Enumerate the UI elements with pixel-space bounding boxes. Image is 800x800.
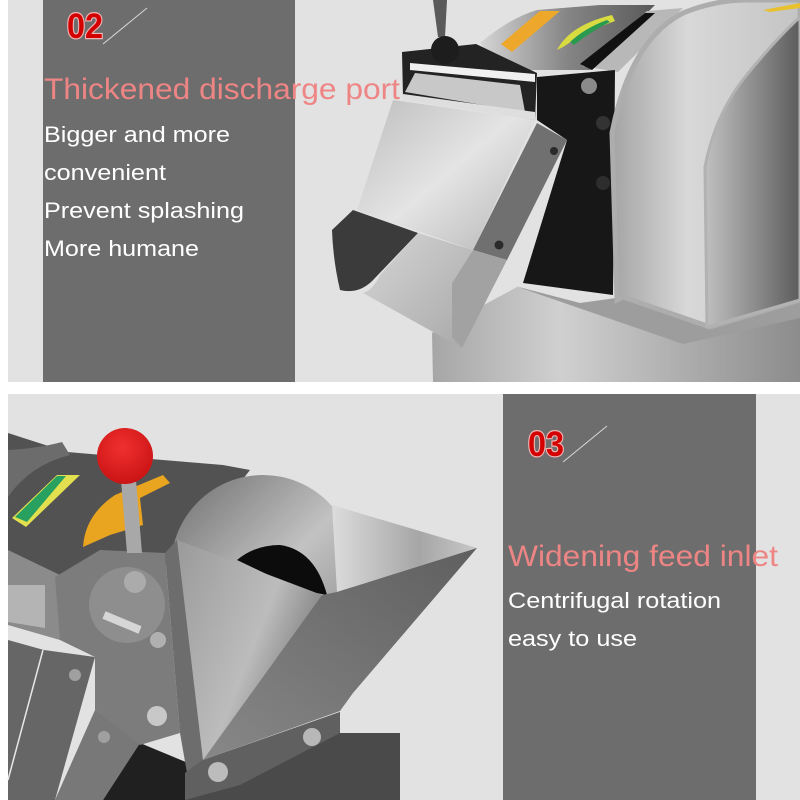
panel: discharge port photo <box>8 0 800 382</box>
mechanism left <box>8 550 60 640</box>
lower chute <box>8 640 95 800</box>
scoop right wall <box>452 250 507 348</box>
rod <box>433 0 447 37</box>
chute sheet <box>357 100 535 250</box>
metal cover <box>612 0 800 327</box>
round drum cover <box>171 475 355 659</box>
text block: Centrifugal rotation <box>508 588 721 613</box>
text block <box>508 588 721 651</box>
panel: discharge port text <box>43 0 401 382</box>
machine: feed hopper and lever <box>8 428 477 800</box>
number badge 02 <box>67 7 147 46</box>
black frame <box>523 70 615 295</box>
cover label <box>763 3 800 12</box>
green label <box>12 475 80 527</box>
machine base <box>432 287 800 382</box>
orange label <box>83 475 170 547</box>
hopper back panel <box>332 505 477 592</box>
number badge 02: 02 <box>67 7 103 46</box>
dark lower body <box>103 743 205 800</box>
hopper left panel <box>177 540 322 760</box>
text block: More humane <box>44 236 199 261</box>
number badge 03 <box>528 425 607 464</box>
gear plate <box>55 550 180 745</box>
lower strut <box>55 710 140 800</box>
lever <box>121 480 142 553</box>
text block: easy to use <box>508 626 637 651</box>
chute side plate <box>473 123 567 260</box>
number badge 03: 03 <box>528 425 564 464</box>
text block <box>44 122 244 261</box>
blade mechanism <box>402 44 537 120</box>
text block: Prevent splashing <box>44 198 244 223</box>
text block: Bigger and more <box>44 122 230 147</box>
base top rim <box>515 286 800 344</box>
machine base <box>185 712 400 800</box>
machine: vegetable cutter with discharge chute <box>332 0 800 382</box>
panel: feed inlet photo <box>8 394 800 800</box>
hopper front panel <box>203 548 477 760</box>
yellow drum label <box>501 11 560 52</box>
scoop <box>363 233 473 348</box>
feed opening <box>237 545 327 595</box>
hopper frame <box>165 540 205 790</box>
heading: Widening feed inlet <box>508 540 779 573</box>
drum body <box>8 433 250 600</box>
panel: feed inlet text <box>503 394 779 800</box>
scoop inner shadow <box>332 210 418 291</box>
text block: convenient <box>44 160 167 185</box>
drum <box>480 5 655 70</box>
heading: Thickened discharge port <box>44 73 401 106</box>
green drum label <box>557 15 615 50</box>
red ball <box>97 428 153 484</box>
